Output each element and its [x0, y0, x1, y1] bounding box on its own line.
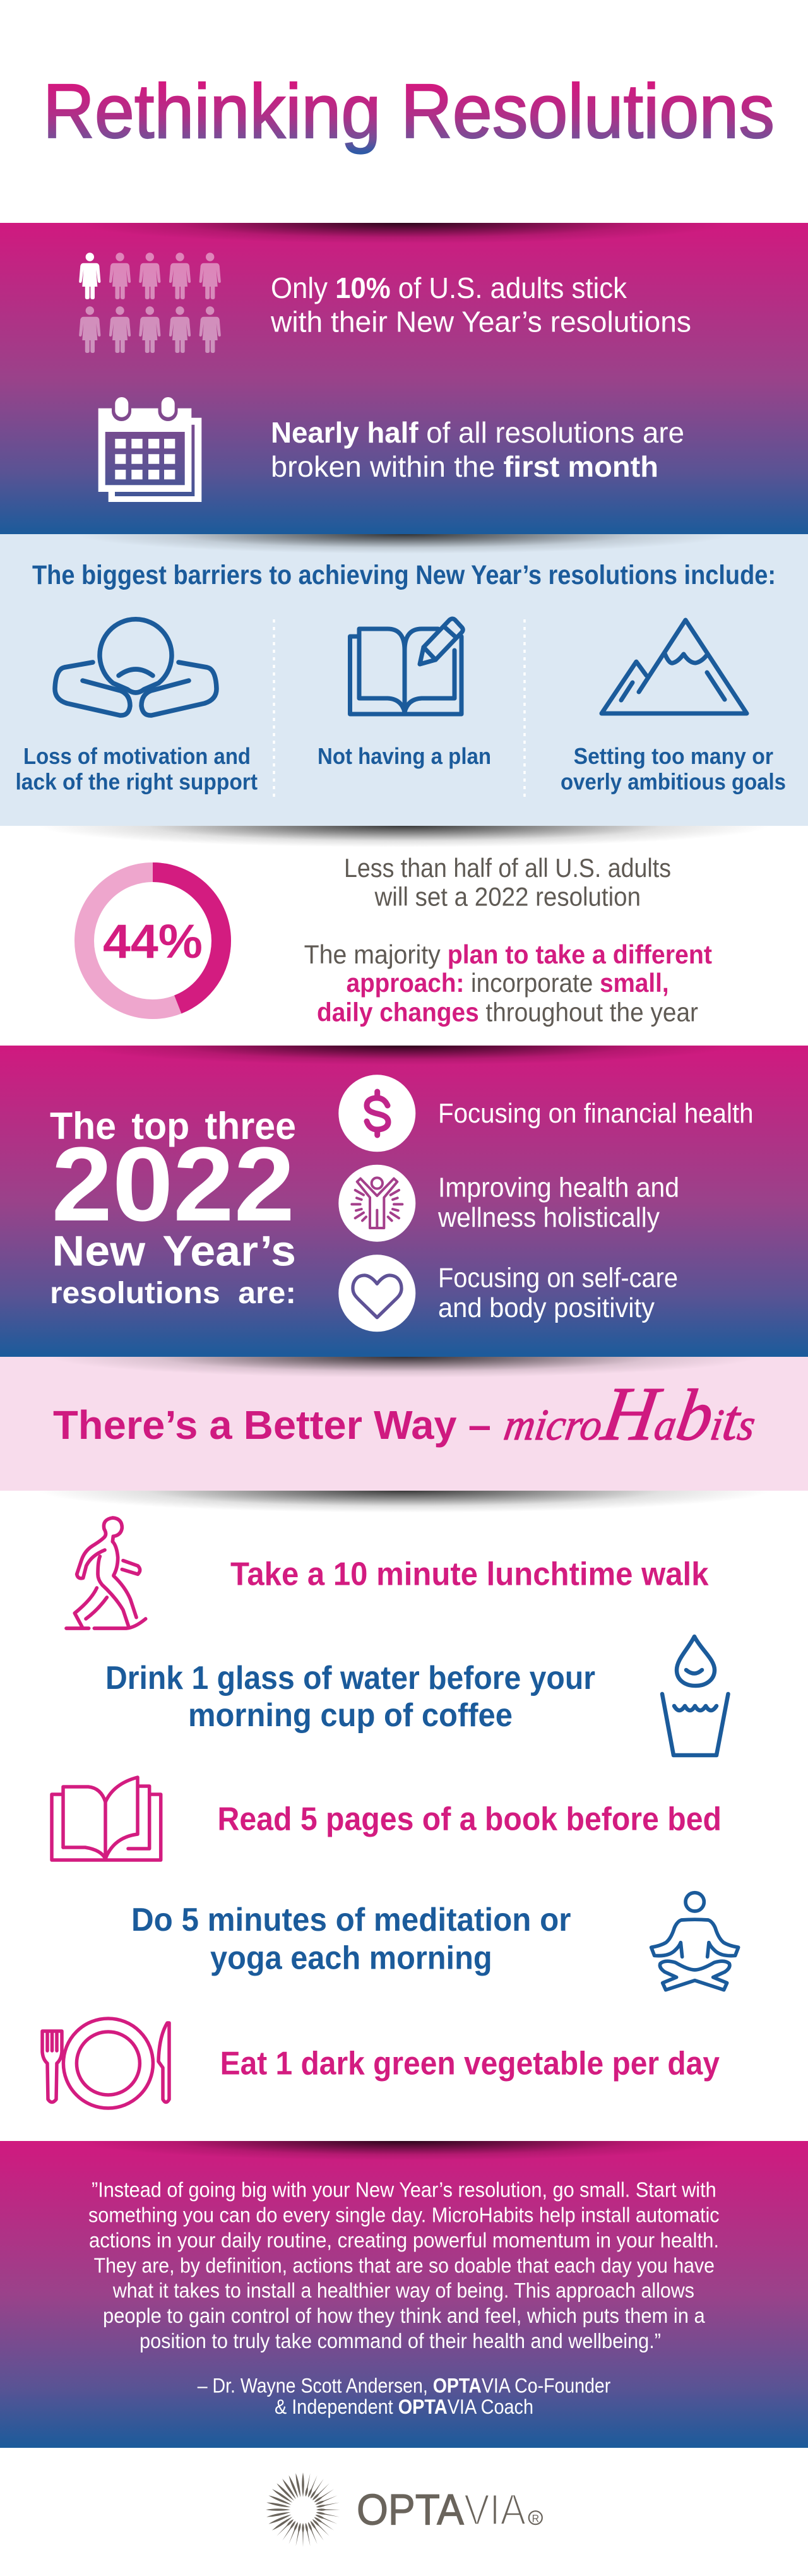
text: self-care: Focusing on self-care [438, 1263, 678, 1293]
heading: top three 2022 [50, 1105, 296, 1310]
text: health and wellness [437, 1172, 679, 1233]
text: loss of motivation [15, 743, 258, 795]
heading: better way: There’s a Better Way – [53, 1402, 491, 1448]
text: health and wellness: Improving health and [438, 1172, 679, 1203]
panel: top three 2022 resolutions [0, 1046, 808, 1357]
icon: ten people, one highlighted [79, 253, 221, 353]
text: meditation or yoga [131, 1902, 571, 1976]
panel: microhabits list [0, 1491, 808, 2141]
text: meditation or yoga: Do 5 minutes of meditation or [131, 1902, 571, 1938]
text: attribution [198, 2374, 611, 2418]
heading: top three 2022: 2022 [52, 1126, 295, 1243]
donut value: 44% [103, 915, 203, 969]
text: read 5 pages: Read 5 pages of a book before bed [217, 1801, 722, 1837]
text: attribution: – Dr. Wayne Scott Andersen, OPTAVIA Co-Founder [198, 2374, 611, 2397]
text: quotation: people to gain control of how they think and feel, which puts them in a [103, 2304, 705, 2327]
text: nearly half broken [271, 416, 684, 483]
text: quotation: They are, by definition, actions that are so doable that each day you have [94, 2254, 715, 2277]
text: 10 percent stick: Only 10% of U.S. adults stick [271, 271, 627, 304]
text: glass of water [105, 1660, 595, 1734]
heading: top three 2022: The top three [50, 1105, 296, 1147]
logo wordmark: VIA [464, 2485, 526, 2534]
text: glass of water: morning cup of coffee [188, 1697, 513, 1734]
icon: sad head resting on arms [55, 619, 217, 715]
text: attribution: & Independent OPTAVIA Coach [275, 2395, 533, 2418]
text: different approach [304, 939, 712, 1027]
text: less than half: Less than half of all U.S. adults [344, 853, 671, 883]
title: Rethinking Resolutions [43, 68, 775, 154]
icon: mountain [602, 620, 747, 713]
text: self-care [438, 1263, 678, 1323]
panel: biggest barriers [0, 534, 808, 826]
text: not having a plan: Not having a plan [318, 743, 491, 769]
text: less than half [344, 853, 671, 912]
text: different approach: daily changes throughout the year [317, 998, 698, 1027]
panel: resolution statistics [0, 223, 808, 534]
panel: 44 percent statistic [0, 826, 808, 1046]
logo wordmark: OPTA [357, 2485, 464, 2534]
panel: quote [0, 2141, 808, 2448]
icon: person with raised arms in circle [338, 1165, 415, 1242]
text: quotation: actions in your daily routine, creating powerful momentum in your health. [89, 2229, 719, 2252]
text: lunchtime walk: Take a 10 minute lunchtime walk [230, 1556, 709, 1593]
text: less than half: will set a 2022 resolution [374, 882, 641, 912]
text: quotation: position to truly take command of their health and wellbeing.” [140, 2329, 661, 2352]
icon: open book with pencil [350, 619, 463, 714]
text: different approach: approach: incorporate small, [347, 968, 669, 998]
text: loss of motivation: lack of the right support [15, 769, 258, 795]
text: nearly half broken: Nearly half of all resolutions are [271, 416, 684, 449]
text: financial health: Focusing on financial health [438, 1098, 754, 1129]
text: self-care: and body positivity [438, 1292, 655, 1323]
text: quotation: ”Instead of going big with your New Year’s resolution, go small. Start with [92, 2178, 716, 2201]
text: 10 percent stick [270, 271, 691, 338]
text: loss of motivation: Loss of motivation and [23, 743, 251, 769]
heading: top three 2022: New Year’s [52, 1227, 296, 1275]
text: setting too many goals: Setting too many or [574, 743, 773, 769]
logo registered mark: R [532, 2513, 539, 2524]
text: setting too many goals: overly ambitious goals [561, 769, 786, 795]
chart: 44 percent donut [85, 873, 221, 1009]
icon: heart in circle [338, 1255, 415, 1332]
logo wordmark [357, 2485, 526, 2534]
panel: there's a better way [0, 1357, 808, 1491]
icon: plate, fork and knife [42, 2018, 169, 2108]
icon: meditating person [651, 1893, 739, 1990]
icon: water drop and glass [662, 1637, 728, 1755]
logo sunburst [266, 2472, 340, 2547]
text: quotation: something you can do every single day. MicroHabits help install automatic [88, 2203, 720, 2226]
script heading: microHabits: microHabits [500, 1371, 763, 1457]
icon: walking person [66, 1518, 146, 1628]
icon: calendar [98, 391, 201, 502]
logo registered mark [529, 2511, 542, 2524]
icon: dollar in circle [338, 1075, 415, 1152]
text: 10 percent stick: with their New Year’s resolutions [270, 306, 691, 338]
text: setting too many goals [561, 743, 786, 795]
text: nearly half broken: broken within the first month [271, 450, 658, 483]
text: health and wellness: wellness holistically [437, 1202, 660, 1233]
text: meditation or yoga: yoga each morning [210, 1940, 492, 1976]
text: dark green vegetable: Eat 1 dark green vegetable per day [220, 2046, 720, 2082]
heading: top three 2022: resolutions are: [50, 1277, 296, 1310]
text: glass of water: Drink 1 glass of water before your [105, 1660, 595, 1696]
text: different approach: The majority plan to take a different [304, 939, 712, 969]
text: quotation [88, 2178, 720, 2352]
text: quotation: what it takes to install a healthier way of being. This approach allows [112, 2279, 694, 2302]
icon: open book [52, 1777, 161, 1860]
logo: Optavia [266, 2472, 542, 2547]
